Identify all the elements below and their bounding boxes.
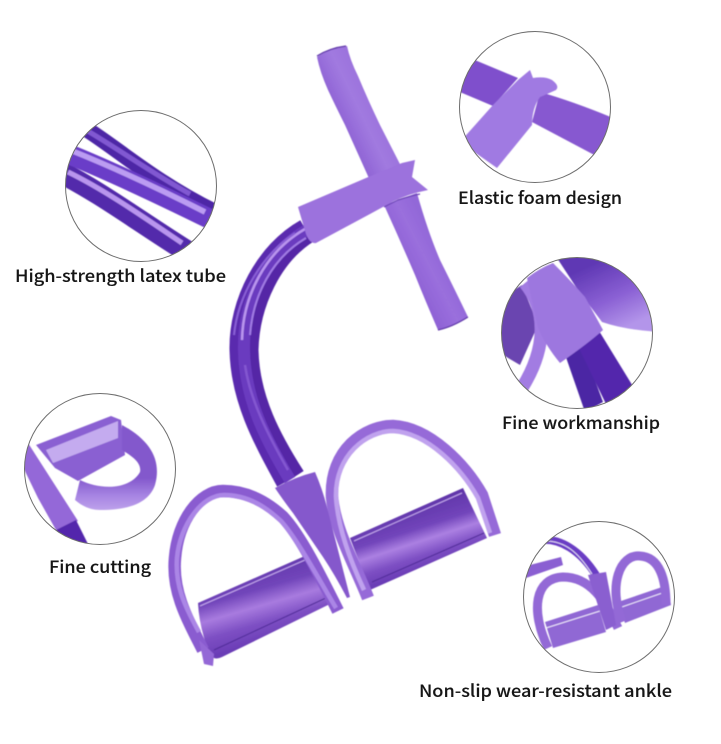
collar [275,472,350,598]
detail circle: non-slip wear-resistant ankle [524,522,674,672]
foam handle lower [384,193,468,330]
circle outline [524,522,674,672]
circle outline [502,258,652,408]
left loop foot tab [199,640,214,666]
foam handle upper [317,46,403,185]
right foot loop [332,426,495,598]
handle end caps [317,46,468,330]
left foot loop [175,491,338,650]
sleeve shadow edge [384,194,420,207]
label: high-strength latex tube: High-strength latex tube [15,262,226,287]
detail circle: fine workmanship [498,255,660,412]
detail circle: high-strength latex tube [58,110,216,262]
foot bar right stripes [354,493,484,582]
detail circle: elastic foam design [455,32,618,182]
detail circle: fine cutting [22,394,176,552]
circle outline [460,32,610,182]
label: non-slip wear-resistant ankle: Non-slip wear-resistant ankle [419,677,672,702]
circle outline [24,394,176,544]
handle sleeve [298,160,428,243]
label: elastic foam design: Elastic foam design [458,184,622,209]
foot bar right [350,488,487,590]
main product: pedal resistance band [175,46,495,666]
circle outline [66,110,216,262]
foot bar left stripes [200,560,328,650]
latex tubes [234,225,312,484]
foot bar left [198,555,332,658]
label: fine workmanship: Fine workmanship [502,409,660,434]
label: fine cutting: Fine cutting [49,553,151,578]
